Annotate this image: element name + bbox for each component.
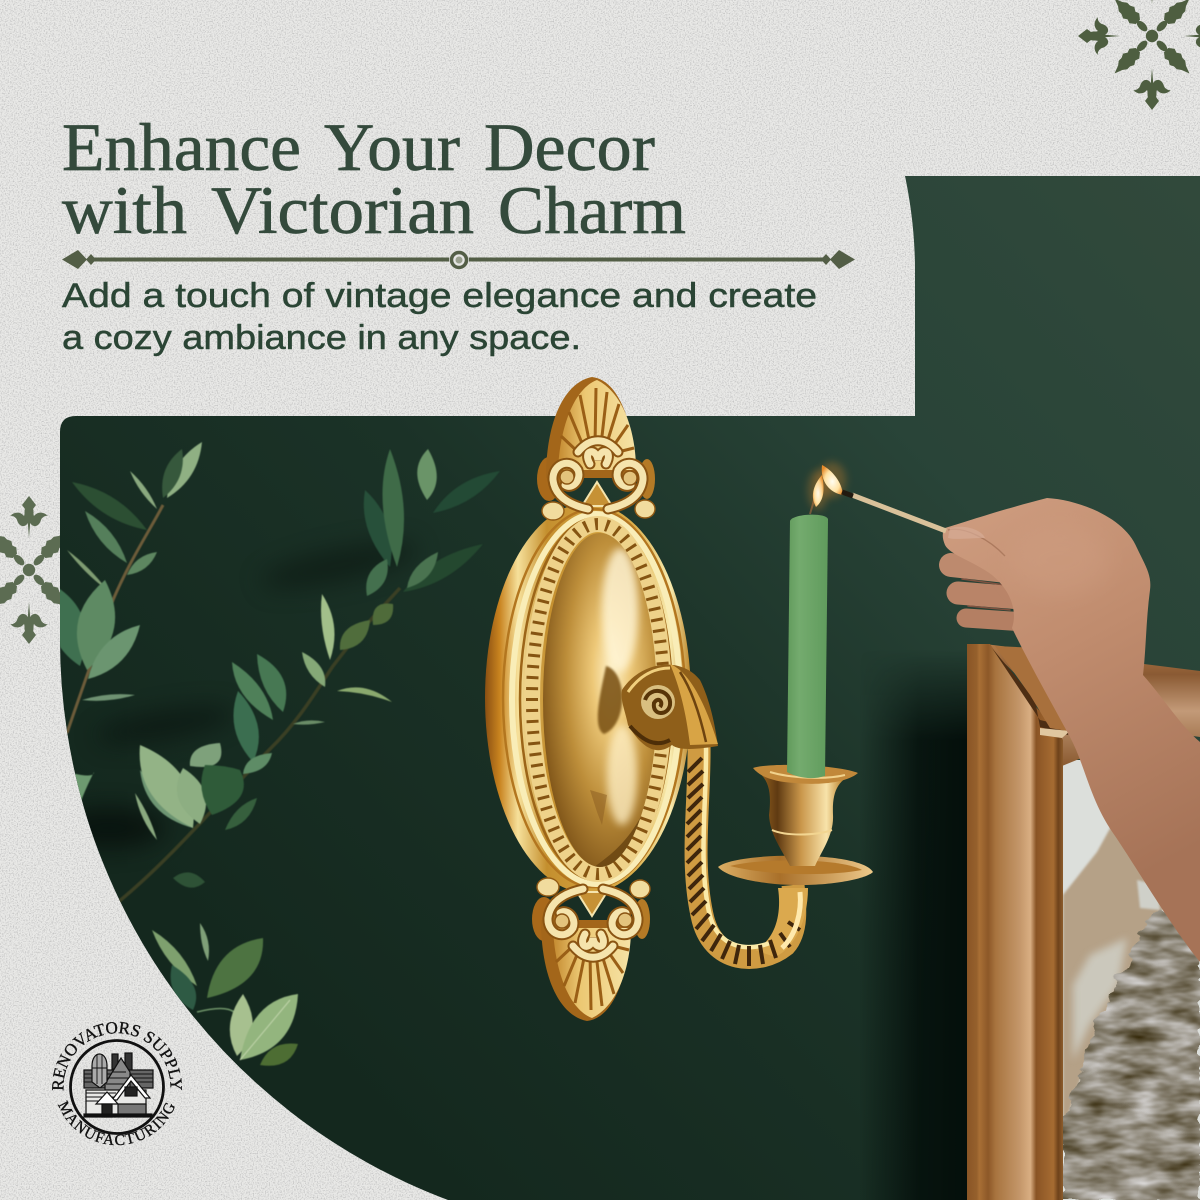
ornate divider [62,250,855,270]
brass rope arm [687,745,808,966]
plant branch: centre [117,449,500,903]
title: Your [324,109,460,185]
title: Decor [484,109,655,185]
bottom fan crest [532,897,650,1021]
fingers [951,565,1025,622]
match flame [818,462,846,498]
matchstick [842,492,946,531]
top fan crest [537,377,655,501]
logo house [84,1053,153,1117]
frame vertical moulding [967,644,1063,1200]
logo lettering [52,1022,182,1146]
ornament: left snowflake [0,496,103,644]
title [62,109,686,248]
brass sconce wall plate [485,377,691,1021]
logo ring [70,1040,164,1134]
title: with [62,172,187,248]
saucer [718,856,873,885]
brass arm scroll [622,664,718,750]
subtitle [62,277,817,357]
palm and forearm [943,498,1200,962]
frame mitre corner [992,648,1070,735]
subtitle: Add a touch of vintage elegance and create [62,277,817,315]
ornament: top right snowflake [1078,0,1200,110]
oval frame [485,503,691,893]
title: Enhance [62,109,301,185]
plant branch: bottom [152,923,298,1066]
cup [755,770,857,866]
logo lettering: MANUFACTURING [58,1100,175,1146]
title: Charm [498,172,686,248]
candle holder [718,765,873,885]
subtitle: a cozy ambiance in any space. [62,319,581,357]
painting [1060,760,1200,1200]
picture frame with painting [967,644,1200,1200]
title: Victorian [211,172,474,248]
frame top rail [985,644,1200,766]
plant branch: upper left [60,442,202,800]
logo: Renovators Supply Manufacturing [52,1022,182,1146]
top scrollwork [542,441,655,520]
bottom scrollwork [537,878,650,957]
logo lettering: RENOVATORS SUPPLY [52,1022,182,1090]
candle wick and flame [808,470,828,514]
polished oval dish [543,533,657,867]
green candle [787,515,828,778]
hand holding match [943,498,1200,962]
beaded ring [532,524,664,874]
cup rim [753,765,858,784]
wall shadows [55,533,967,1200]
dish reflections [590,544,644,867]
